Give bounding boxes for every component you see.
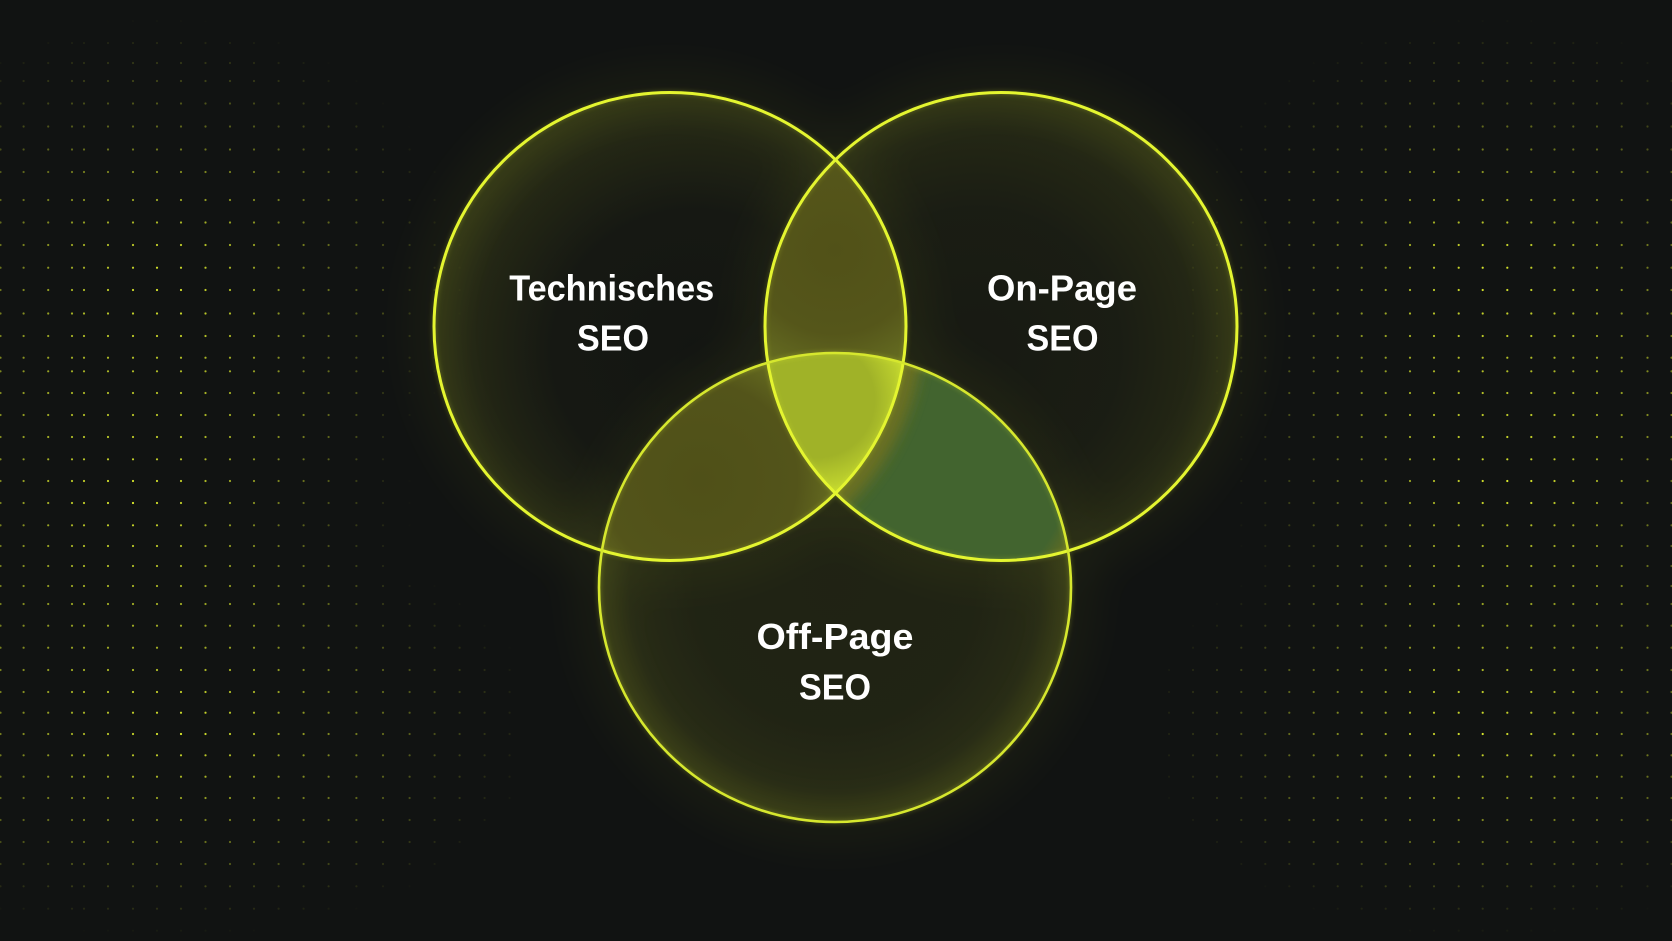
circle outlines: [434, 92, 1237, 822]
circle fill: Technisches SEO: [434, 92, 906, 560]
label: On-Page SEO: On-Page: [987, 268, 1137, 309]
label: Technisches SEO: Technisches: [509, 268, 714, 309]
overlap: Technisches and On-Page: [766, 162, 904, 362]
label: Off-Page SEO: SEO: [799, 666, 871, 708]
label: Off-Page SEO: Off-Page: [756, 616, 914, 657]
circle fill: On-Page SEO: [765, 92, 1237, 560]
label: On-Page SEO: [987, 268, 1137, 359]
overlap: all three: [770, 354, 902, 491]
label: Technisches SEO: [509, 268, 714, 359]
circle fill: Off-Page SEO: [599, 353, 1071, 822]
label: Off-Page SEO: [756, 616, 914, 708]
overlap shading along Technisches edge: [838, 365, 924, 506]
outer glow behind circles: [430, 88, 1241, 826]
label: Technisches SEO: SEO: [577, 318, 649, 359]
circle outlines glow: [434, 92, 1237, 822]
overlap: Technisches and Off-Page: [604, 364, 834, 559]
label: On-Page SEO: SEO: [1026, 318, 1098, 359]
overlap: On-Page and Off-Page: [845, 369, 1066, 559]
